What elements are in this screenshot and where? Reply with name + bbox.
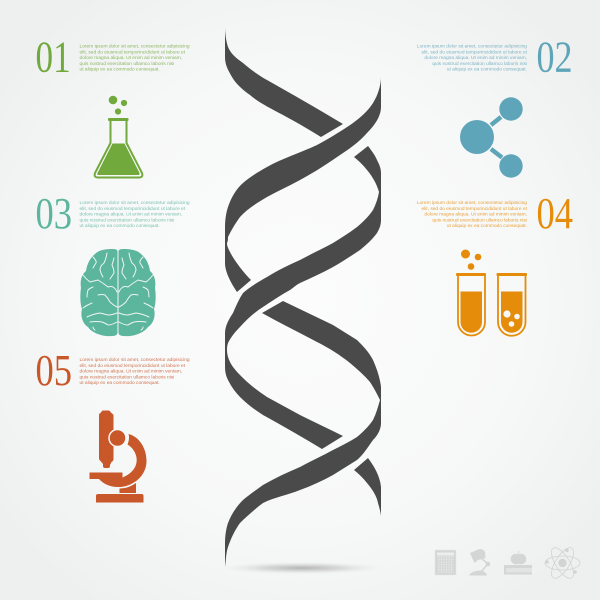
text block 02: Lorem ipsum dolor sit amet, consectetur adipisicing xyxy=(417,44,527,50)
icon: desk lamp xyxy=(469,549,490,576)
icon: apple on book xyxy=(504,551,532,574)
text block 04: ut aliquip ex ea commodo consequat. xyxy=(447,223,527,229)
text block 05: dolore magna aliqua. Ut enim ad minim veniam, xyxy=(80,368,182,374)
section 03 xyxy=(36,189,190,336)
text block 01: quis nostrud exercitation ullamco laboris nisi xyxy=(80,61,174,67)
icon: molecule xyxy=(460,97,523,178)
section 04 xyxy=(417,189,573,336)
text block 04: Lorem ipsum dolor sit amet, consectetur adipisicing xyxy=(417,200,527,206)
icon: microscope xyxy=(90,410,146,502)
text block 05: elit, sed do eiusmod temporincididunt ut labore et xyxy=(80,363,186,369)
icon: atom xyxy=(545,544,580,582)
icon: calculator xyxy=(435,550,456,575)
DNA double helix xyxy=(225,26,381,567)
text block 01: ut aliquip ex ea commodo consequat. xyxy=(80,67,160,73)
section 01 xyxy=(36,32,190,178)
number 02: 02 xyxy=(536,32,573,82)
text block 02: dolore magna aliqua. Ut enim ad minim veniam, xyxy=(424,55,527,61)
floor shadow under helix xyxy=(216,562,388,574)
text block 02: ut aliquip ex ea commodo consequat. xyxy=(447,67,527,73)
icon: test tubes xyxy=(456,250,527,336)
text block 03: Lorem ipsum dolor sit amet, consectetur adipisicing xyxy=(80,200,190,206)
section 02 xyxy=(417,32,573,178)
number 04: 04 xyxy=(536,189,573,238)
text block 05: ut aliquip ex ea commodo consequat. xyxy=(80,380,160,386)
number 05: 05 xyxy=(36,346,72,395)
icon: flask xyxy=(95,96,142,178)
text block 04: elit, sed do eiusmod temporincididunt ut labore et xyxy=(421,206,528,212)
section 05 xyxy=(36,346,190,502)
text block 02: elit, sed do eiusmod temporincididunt ut labore et xyxy=(421,50,528,56)
text block 04: quis nostrud exercitation ullamco laboris nisi xyxy=(432,217,527,223)
text block 01: Lorem ipsum dolor sit amet, consectetur adipisicing xyxy=(80,44,190,50)
text block 03: quis nostrud exercitation ullamco laboris nisi xyxy=(80,217,174,223)
text block 02: quis nostrud exercitation ullamco laboris nisi xyxy=(432,61,527,67)
text block 01: elit, sed do eiusmod temporincididunt ut labore et xyxy=(80,50,186,56)
number 01: 01 xyxy=(36,32,71,82)
text block 05: Lorem ipsum dolor sit amet, consectetur adipisicing xyxy=(80,357,190,363)
text block 03: elit, sed do eiusmod temporincididunt ut labore et xyxy=(80,206,186,212)
text block 01: dolore magna aliqua. Ut enim ad minim veniam, xyxy=(80,55,182,61)
icon: brain xyxy=(80,249,156,336)
text block 05: quis nostrud exercitation ullamco laboris nisi xyxy=(80,374,174,380)
number 03: 03 xyxy=(36,189,72,238)
text block 03: dolore magna aliqua. Ut enim ad minim veniam, xyxy=(80,212,182,218)
bottom icons xyxy=(435,544,580,582)
text block 03: ut aliquip ex ea commodo consequat. xyxy=(80,223,160,229)
text block 04: dolore magna aliqua. Ut enim ad minim veniam, xyxy=(424,212,527,218)
